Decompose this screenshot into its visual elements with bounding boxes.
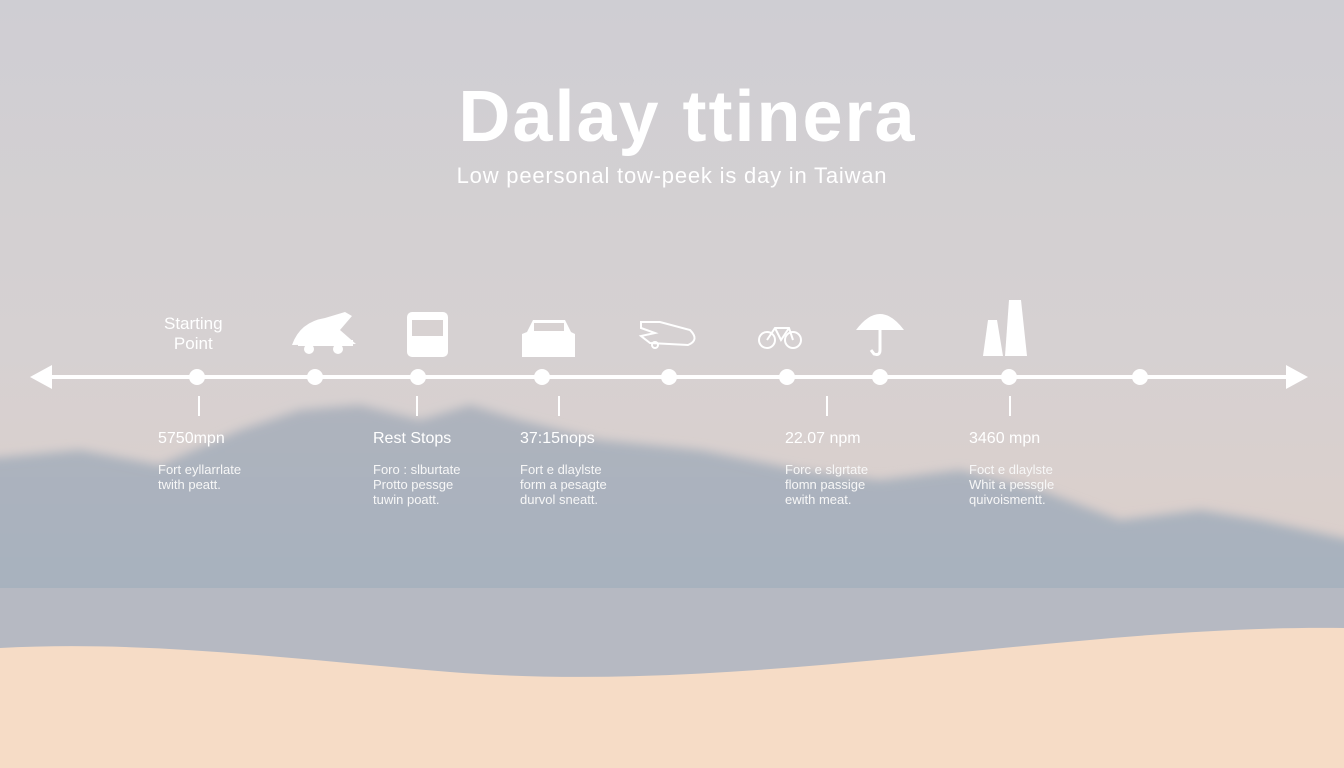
stop 4 [785,430,868,507]
icon: bus [407,312,448,357]
stop 1: Fort eyllarrlate [158,462,241,477]
stop 5: quivoismentt. [969,492,1046,507]
stop 2: Protto pessge [373,477,453,492]
stop 5: Foct e dlaylste [969,462,1053,477]
stop 5 [969,430,1054,507]
stop 3: form a pesagte [520,477,607,492]
stop 5: Whit a pessgle [969,477,1054,492]
icon: car [522,320,575,357]
stop 5: 3460 mpn [969,430,1040,447]
stop 3 [520,430,607,507]
stop 4: flomn passige [785,477,865,492]
stop 4: ewith meat. [785,492,851,507]
stop 2: Foro : slburtate [373,462,460,477]
icon: towers [983,300,1027,356]
stop 4: 22.07 npm [785,430,861,447]
stop 3: durvol sneatt. [520,492,598,507]
stop 2 [373,430,460,507]
stop 4: Forc e slgrtate [785,462,868,477]
stop 1: twith peatt. [158,477,221,492]
stop 1 [158,430,241,492]
icon: umbrella [856,314,904,354]
icon: vehicle [292,312,356,354]
stop 1: 5750mpn [158,430,225,447]
icon: bicycle [759,328,801,348]
icon: boat [641,322,695,348]
label: starting point: Starting [164,314,223,333]
label: starting point [164,314,223,353]
subtitle: Low peersonal tow-peek is day in Taiwan [457,163,887,188]
stop 3: Fort e dlaylste [520,462,602,477]
stop 2: tuwin poatt. [373,492,440,507]
stop 2: Rest Stops [373,430,451,447]
stop 3: 37:15nops [520,430,595,447]
label: starting point: Point [174,334,213,353]
title: Dalay ttinera [458,77,917,157]
